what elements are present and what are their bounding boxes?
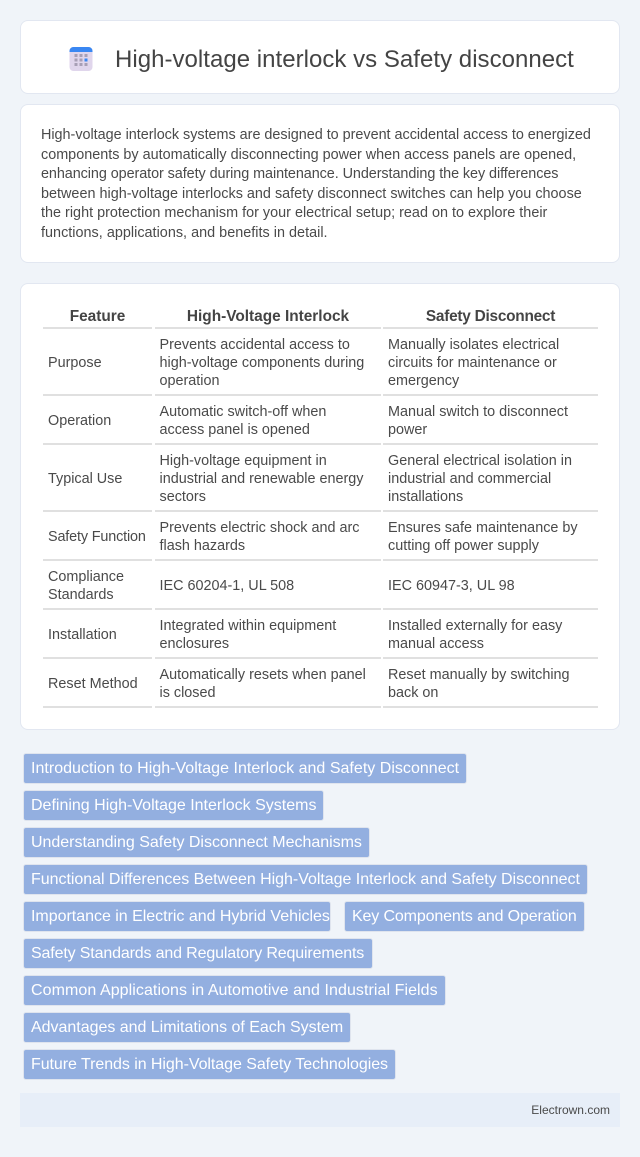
table header: Safety Disconnect xyxy=(426,308,555,325)
topic tag: Introduction to High-Voltage Interlock and Safety Disconnect xyxy=(31,760,459,777)
intro text: enhancing operator safety during maintenance. Understanding the key differences xyxy=(41,166,558,182)
row: installation: Integrated within equipment xyxy=(160,618,336,634)
row: operation: access panel is opened xyxy=(160,422,310,438)
row: reset method: back on xyxy=(388,685,438,701)
topic tag xyxy=(23,753,467,784)
row: typical use: General electrical isolation in xyxy=(388,453,572,469)
topic tag xyxy=(23,975,446,1006)
row: purpose: Manually isolates electrical xyxy=(388,337,559,353)
topic tag xyxy=(23,864,588,895)
topic tag: Key Components and Operation xyxy=(352,908,577,925)
topic tag: Safety Standards and Regulatory Requirements xyxy=(31,945,364,962)
row: typical use xyxy=(48,453,572,505)
topic tag xyxy=(23,1049,396,1080)
row: compliance standards: Compliance xyxy=(48,569,124,585)
row: installation: Installed externally for easy xyxy=(388,618,562,634)
row: compliance standards xyxy=(48,569,515,603)
row: typical use: sectors xyxy=(160,489,206,505)
table header: Feature xyxy=(70,308,125,325)
row: compliance standards: IEC 60204-1, UL 508 xyxy=(160,578,294,594)
row: purpose: operation xyxy=(160,373,220,389)
row: reset method: Reset Method xyxy=(48,676,138,692)
row: installation: manual access xyxy=(388,636,484,652)
row: purpose: circuits for maintenance or xyxy=(388,355,557,371)
intro text: High-voltage interlock systems are designed to prevent accidental access to energized xyxy=(41,127,591,143)
topic tag xyxy=(23,1012,351,1043)
intro text: components by automatically disconnecting power when access panels are opened, xyxy=(41,147,576,163)
row: reset method: Reset manually by switching xyxy=(388,667,570,683)
intro text: functions, applications, and benefits in detail. xyxy=(41,225,328,241)
topic tag: Importance in Electric and Hybrid Vehicles xyxy=(31,908,330,925)
table header: High-Voltage Interlock xyxy=(187,308,349,325)
row: safety function xyxy=(48,520,578,554)
row: safety function: Prevents electric shock and arc xyxy=(160,520,359,536)
row: operation: Manual switch to disconnect xyxy=(388,404,568,420)
comparison table panel xyxy=(20,283,620,730)
row: typical use: industrial and commercial xyxy=(388,471,551,487)
row: reset method xyxy=(48,667,570,701)
row: safety function: Safety Function xyxy=(48,529,146,545)
row: operation xyxy=(48,404,568,438)
row: purpose: Purpose xyxy=(48,355,102,371)
row: safety function: Ensures safe maintenance by xyxy=(388,520,578,536)
topic tag: Functional Differences Between High-Voltage Interlock and Safety Disconnect xyxy=(31,871,580,888)
topic tag: Common Applications in Automotive and Industrial Fields xyxy=(31,982,438,999)
intro text: between high-voltage interlocks and safety disconnect switches can help you choose xyxy=(41,186,582,202)
topic tag: Future Trends in High-Voltage Safety Technologies xyxy=(31,1056,388,1073)
row: compliance standards: IEC 60947-3, UL 98 xyxy=(388,578,515,594)
row: operation: power xyxy=(388,422,427,438)
topic tag xyxy=(23,827,370,858)
row: operation: Operation xyxy=(48,413,111,429)
topic tag: Understanding Safety Disconnect Mechanisms xyxy=(31,834,362,851)
row: reset method: is closed xyxy=(160,685,216,701)
row: purpose: high-voltage components during xyxy=(160,355,364,371)
icon: calendar xyxy=(70,47,92,71)
row: purpose: emergency xyxy=(388,373,459,389)
row: installation xyxy=(48,618,562,652)
intro panel xyxy=(20,104,620,263)
row: safety function: cutting off power supply xyxy=(388,538,539,554)
row: operation: Automatic switch-off when xyxy=(160,404,326,420)
table header xyxy=(70,308,556,325)
row: typical use: Typical Use xyxy=(48,471,122,487)
topic tag: Defining High-Voltage Interlock Systems xyxy=(31,797,316,814)
topic tag: Advantages and Limitations of Each System xyxy=(31,1019,343,1036)
header card xyxy=(20,20,620,94)
row: typical use: installations xyxy=(388,489,463,505)
row: installation: enclosures xyxy=(160,636,229,652)
row: installation: Installation xyxy=(48,627,117,643)
row: purpose: Prevents accidental access to xyxy=(160,337,350,353)
intro text xyxy=(41,127,591,241)
topic tag xyxy=(344,901,585,932)
footer credit: Electrown.com xyxy=(531,1103,610,1117)
title: High-voltage interlock vs Safety disconnect xyxy=(115,46,574,73)
topic tag xyxy=(23,938,373,969)
footer xyxy=(20,1093,620,1127)
row: safety function: flash hazards xyxy=(160,538,245,554)
row: purpose xyxy=(48,337,559,389)
row: reset method: Automatically resets when panel xyxy=(160,667,366,683)
row: compliance standards: Standards xyxy=(48,587,114,603)
row: typical use: industrial and renewable energy xyxy=(160,471,364,487)
intro text: the right protection mechanism for your electrical setup; read on to explore their xyxy=(41,205,547,221)
topic tag xyxy=(23,901,331,932)
topic tag xyxy=(23,790,324,821)
row: typical use: High-voltage equipment in xyxy=(160,453,327,469)
